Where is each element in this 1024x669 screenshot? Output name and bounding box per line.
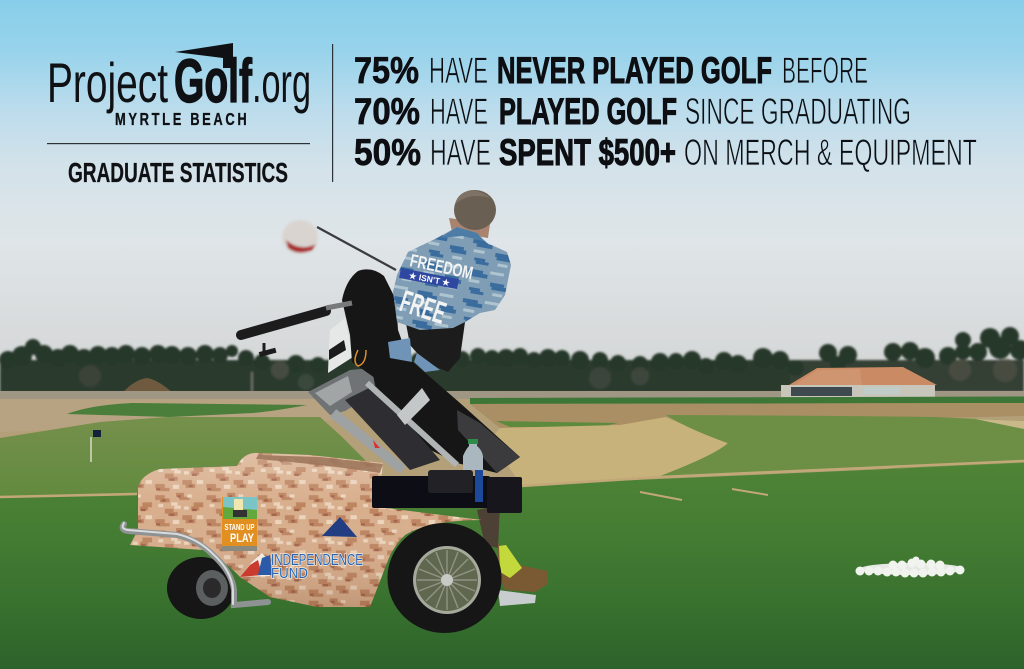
project golf wordmark: .org [252,51,311,114]
stand up and play badge: STAND UP [224,523,255,532]
shirt print: banner [399,268,459,290]
dirt mound [117,378,178,399]
statistic 70 percent: 70% [354,91,420,132]
tan cart paths [0,461,1024,500]
shirt print: free: FREE [396,283,450,331]
myrtle beach subtitle: MYRTLE BEACH [115,110,247,130]
grey shorts [457,410,520,473]
folded flag badge [322,517,357,537]
sand area [490,417,728,486]
seat base box [372,470,522,513]
black seat back [342,269,408,378]
statistic 75 percent: BEFORE [782,50,868,91]
ground base tan [0,393,1024,513]
neck [449,218,490,238]
sky background [0,0,1024,400]
independence fund logo [240,552,363,582]
right fairway [660,415,1024,476]
drive wheel [388,523,502,633]
shoe [497,543,548,592]
black harness [405,318,465,372]
head [454,190,496,230]
left tan dirt [0,399,340,432]
statistic 70 percent: HAVE [430,91,488,132]
rear tyre [167,557,235,619]
golfer on adaptive cart [123,190,548,633]
light pole [251,372,253,392]
stand up and play badge [222,497,257,551]
tan dirt band [470,403,1024,428]
vertical divider [332,44,333,182]
golfer torso [388,190,511,372]
fence strip [0,391,1024,399]
graduate statistics heading: GRADUATE STATISTICS [68,157,288,188]
cart front opening [256,455,383,473]
arm rest bar [241,303,352,357]
statistic 70 percent [354,91,911,132]
statistic 75 percent: 75% [354,50,419,91]
shirt collar [440,227,484,241]
statistics list [354,50,977,173]
statistic 50 percent [354,132,977,173]
silver bumper [123,523,268,605]
left fairway [0,417,385,500]
far green patch [67,403,307,417]
logo rule [47,143,310,144]
statistic 70 percent: PLAYED GOLF [499,91,677,132]
lower shirt [388,338,440,372]
far right green strip [470,396,1024,404]
statistic 75 percent: HAVE [429,50,488,91]
footplate [498,590,536,606]
clubhouse [781,367,937,397]
independence fund logo: INDEPENDENCE [271,552,363,569]
project golf wordmark [47,47,311,115]
distant tree line [0,327,1024,393]
project golf wordmark: Project [47,51,168,114]
golf club [282,220,396,270]
statistic 75 percent [354,50,868,91]
independence fund logo: FUND [271,565,308,582]
shirt print: banner: ★ ISN'T ★ [408,270,452,288]
lower leg [477,505,500,548]
shirt print: freedom: FREEDOM [408,250,475,283]
blue camo shirt [393,227,511,330]
logo block [47,43,311,188]
water bottle [463,439,483,502]
white bag panel [328,318,353,373]
camouflage cart body [130,453,482,607]
seat back pad [373,357,520,473]
foreground grass [0,463,1024,669]
statistic 75 percent: NEVER PLAYED GOLF [497,50,772,91]
statistic 50 percent: SPENT $500+ [499,132,676,173]
flag mark [175,43,233,68]
small green strip [496,421,618,427]
statistic 50 percent: 50% [354,132,421,173]
metal seat frame [308,368,457,470]
right tan edge [975,419,1024,429]
stand up and play badge: PLAY [230,531,254,545]
project golf wordmark: Golf [174,47,252,115]
flag pin [91,430,101,462]
orange cable [355,350,366,366]
golf balls [856,556,964,578]
statistic 50 percent: HAVE [430,132,491,173]
